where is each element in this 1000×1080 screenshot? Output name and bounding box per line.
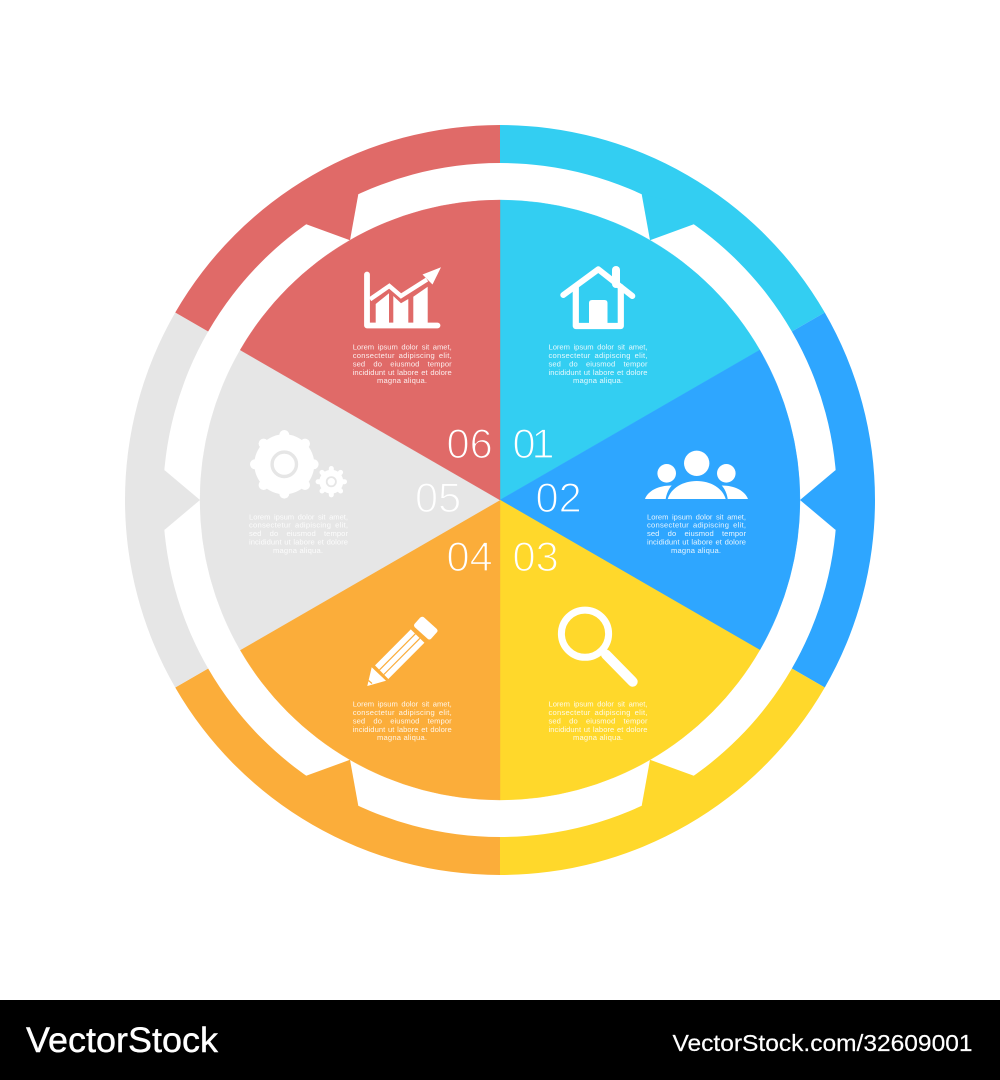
text block 06: consectetur adipiscing elit, [353,351,452,360]
text block 05: magna aliqua. [273,546,323,555]
arrow wedge 04 [306,760,358,806]
panel: segment 02 blue [500,312,875,688]
text block 04 [353,700,452,742]
text block 03: incididunt ut labore et dolore [548,725,648,734]
text block 06: magna aliqua. [377,376,427,385]
panel: segment 05 grey [125,312,500,688]
text block 01 [548,342,648,385]
pie sector 02 [500,350,800,650]
pie sector 04 [240,500,500,800]
text block 03: magna aliqua. [573,733,623,742]
outer ring arc 01 [500,125,825,332]
arrow wedge 01 [642,194,694,240]
text block 01: incididunt ut labore et dolore [548,368,648,377]
text block 03: consectetur adipiscing elit, [548,708,648,717]
text block 05: sed do eiusmod tempor [249,529,348,538]
text block 05 [249,512,348,555]
pie sector 05 [200,350,500,650]
number 01: 01 [512,420,555,467]
text block 05: incididunt ut labore et dolore [249,538,348,546]
text block 04: sed do eiusmod tempor [353,716,452,726]
text block 01: magna aliqua. [573,376,623,385]
text block 04: consectetur adipiscing elit, [353,708,452,717]
text block 01: consectetur adipiscing elit, [548,351,648,360]
footer brand: VectorStock [26,1021,219,1060]
text block 03: sed do eiusmod tempor [548,716,648,726]
icon: people [645,451,748,499]
number 03: 03 [512,533,559,580]
text block 03 [548,700,648,742]
outer ring arc 02 [792,312,875,688]
arrow wedge 03 [642,760,694,806]
icon: pencil [367,617,438,686]
icon: magnifier [561,610,633,682]
footer image id: VectorStock.com/32609001 [672,1030,972,1056]
outer ring arc 05 [125,312,208,688]
text block 01: Lorem ipsum dolor sit amet, [548,342,648,352]
text block 02: consectetur adipiscing elit, [647,521,746,530]
text block 03: Lorem ipsum dolor sit amet, [548,700,648,709]
text block 02: Lorem ipsum dolor sit amet, [647,512,746,521]
pie sector 06 [240,200,500,500]
number 02: 02 [536,474,582,521]
text block 02: incididunt ut labore et dolore [647,538,746,546]
arrow wedge 02 [800,470,845,530]
text block 05: consectetur adipiscing elit, [249,521,348,530]
panel: segment 03 yellow [500,500,825,875]
text block 06: sed do eiusmod tempor [353,359,452,368]
text block 02 [647,512,746,555]
pie sector 03 [500,500,760,800]
text block 02: magna aliqua. [671,546,721,555]
text block 01: sed do eiusmod tempor [548,359,648,368]
text block 04: incididunt ut labore et dolore [353,725,452,734]
text block 04: magna aliqua. [377,733,427,742]
text block 04: Lorem ipsum dolor sit amet, [353,700,452,709]
number 04: 04 [446,533,493,580]
text block 06: Lorem ipsum dolor sit amet, [353,342,452,352]
outer ring arc 06 [175,125,500,331]
panel: segment 01 cyan [500,125,825,500]
outer ring arc 04 [175,668,500,875]
icon: gears [254,434,344,495]
number 05: 05 [415,474,461,521]
arrow wedge 06 [306,194,358,240]
text block 05: Lorem ipsum dolor sit amet, [249,512,348,521]
text block 02: sed do eiusmod tempor [647,529,746,538]
number 06: 06 [446,420,493,467]
text block 06: incididunt ut labore et dolore [353,368,452,377]
pie sector 01 [500,200,760,500]
panel: segment 06 red [175,125,500,500]
panel: segment 04 orange [175,500,500,875]
footer bar [0,1000,1000,1080]
arrow wedge 05 [155,470,200,530]
icon: growth chart [367,267,441,326]
icon: house [563,269,632,326]
outer ring arc 03 [500,668,825,875]
text block 06 [353,342,452,385]
